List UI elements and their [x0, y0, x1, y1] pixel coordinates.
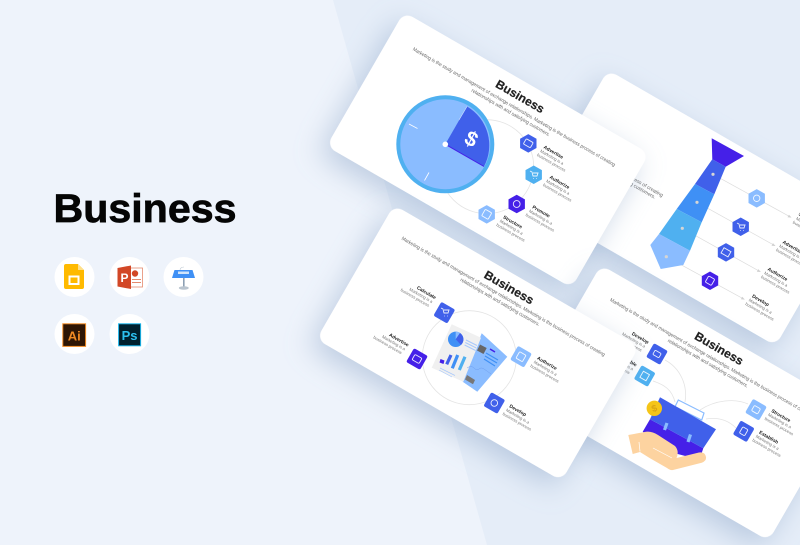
label: establish: Marketing is a — [755, 434, 780, 451]
label: calculate: Calculate — [416, 285, 437, 301]
label: develop: Marketing is a — [748, 297, 773, 315]
label: develop: Develop — [631, 331, 650, 346]
label: promote: Marketing is a — [528, 208, 554, 226]
orbit ring — [440, 120, 534, 214]
icon: powerpoint: P — [120, 271, 129, 285]
label: promote: Promote — [531, 205, 551, 220]
main heading: Business — [54, 187, 236, 231]
label: authorize: Marketing is a — [763, 270, 789, 288]
label: authorize: Authorize — [536, 356, 558, 372]
label: authorize: business process — [542, 182, 573, 203]
label: develop: Develop — [508, 404, 527, 418]
square icon: develop — [483, 392, 505, 414]
title: Business — [692, 329, 746, 368]
label: develop: business process — [502, 411, 532, 432]
briefcase illustration — [628, 397, 716, 470]
description: relationships with and satisfying customers. — [570, 147, 656, 201]
icon: photoshop — [110, 314, 150, 354]
hexagon icon: cart — [526, 166, 542, 184]
description: Marketing is the study and management of exchange relationships. Marketing is the business process of creating — [411, 47, 616, 168]
label: authorize: business process — [760, 274, 791, 295]
tie chart — [650, 138, 744, 269]
label: develop — [744, 293, 780, 322]
icon: illustrator: Ai — [68, 328, 81, 344]
square icon: develop — [646, 343, 668, 365]
label: advertise: Advertise — [542, 145, 565, 161]
connector curves — [653, 360, 748, 428]
hexagon icon: shield — [748, 189, 765, 208]
label: enable: Marketing is a — [609, 354, 635, 372]
panel: report slide — [316, 205, 639, 481]
label: develop — [612, 323, 650, 354]
label: authorize: Authorize — [548, 175, 571, 191]
label: develop: business process — [612, 332, 643, 353]
briefcase illustration: $ — [650, 403, 660, 415]
label: structure: Marketing is a — [767, 412, 793, 430]
label: structure: Structure — [502, 215, 523, 231]
square icon: advertise — [406, 348, 428, 370]
label: authorize — [760, 266, 796, 295]
label: calculate: business process — [400, 287, 430, 308]
description: Marketing is the study and management of exchange relationships. Marketing is the business process of creating — [400, 236, 606, 358]
leader lines — [666, 174, 791, 299]
panel: briefcase slide — [524, 265, 800, 541]
label: advertise — [372, 326, 410, 356]
label: enable: business process — [600, 355, 631, 375]
arrow tips — [741, 215, 792, 300]
label: advertise — [536, 144, 572, 173]
clock chart — [396, 95, 494, 193]
label: advertise: Advertise — [388, 332, 410, 349]
label: develop: Develop — [751, 294, 770, 308]
square icon: structure — [745, 399, 767, 421]
title: Business — [493, 77, 547, 116]
square icon: authorize — [510, 346, 532, 368]
square icon: calculate — [433, 302, 455, 324]
title: Business — [482, 268, 537, 308]
label: develop: Marketing is a — [505, 407, 531, 425]
label: establish: business process — [751, 437, 782, 458]
label: establish — [751, 429, 787, 458]
hexagon icon: card — [718, 243, 734, 262]
label: structure — [764, 407, 799, 436]
description: relationships with and satisfying customers. — [666, 338, 749, 389]
label: calculate — [400, 279, 437, 309]
panel: clock slide — [326, 12, 649, 288]
hexagon icon: advertise — [520, 134, 536, 153]
label: enable: Enable — [621, 355, 638, 369]
label: advertise: Marketing is a — [381, 334, 407, 352]
icon: powerpoint — [110, 257, 150, 297]
description: Marketing is the study and management of exchange relationships. Marketing is the business process of creating — [445, 69, 664, 199]
label: authorize: business process — [529, 363, 560, 384]
label: structure: Marketing is a — [499, 218, 524, 236]
label: develop — [502, 403, 537, 432]
label: authorize: Marketing is a — [545, 178, 571, 196]
background right panel — [333, 0, 800, 545]
label: structure: business process — [495, 222, 526, 243]
hexagon icon: promote — [508, 195, 525, 213]
label: structure — [495, 214, 531, 243]
description: relationships with and satisfying customers. — [459, 277, 541, 328]
label: structure: Structure — [770, 408, 792, 424]
description: relationships with and satisfying customers. — [470, 88, 551, 138]
icon: keynote — [164, 257, 204, 297]
label: authorize — [529, 355, 565, 384]
label: structure: business process — [764, 416, 794, 436]
documents illustration — [432, 324, 507, 392]
square icon: enable — [634, 365, 656, 387]
hexagon icon: cart — [732, 218, 749, 236]
clock chart: $ — [460, 126, 482, 152]
icon: google slides — [54, 257, 94, 297]
orbit ring — [422, 311, 516, 405]
label: promote: business process — [525, 212, 555, 233]
label: calculate: Marketing is a — [409, 287, 434, 304]
hexagon icon: structure — [478, 205, 495, 224]
label: authorize: Authorize — [766, 267, 789, 283]
icon: photoshop: Ps — [122, 328, 138, 343]
label: advertise: business process — [536, 152, 567, 173]
label: authorize: Marketing is a — [533, 359, 558, 377]
label: promote — [525, 204, 560, 233]
panel: tie slide — [442, 69, 800, 346]
icon: illustrator — [54, 314, 94, 354]
label: develop: business process — [744, 301, 775, 322]
square icon: establish — [733, 420, 755, 442]
label: develop: Marketing is a — [621, 331, 647, 349]
hexagon icon: box — [702, 272, 718, 290]
label: authorize — [542, 174, 578, 203]
label: enable — [600, 346, 638, 376]
label: advertise: Marketing is a — [539, 148, 565, 166]
label: advertise: business process — [372, 335, 403, 355]
label: establish: Establish — [758, 430, 779, 446]
